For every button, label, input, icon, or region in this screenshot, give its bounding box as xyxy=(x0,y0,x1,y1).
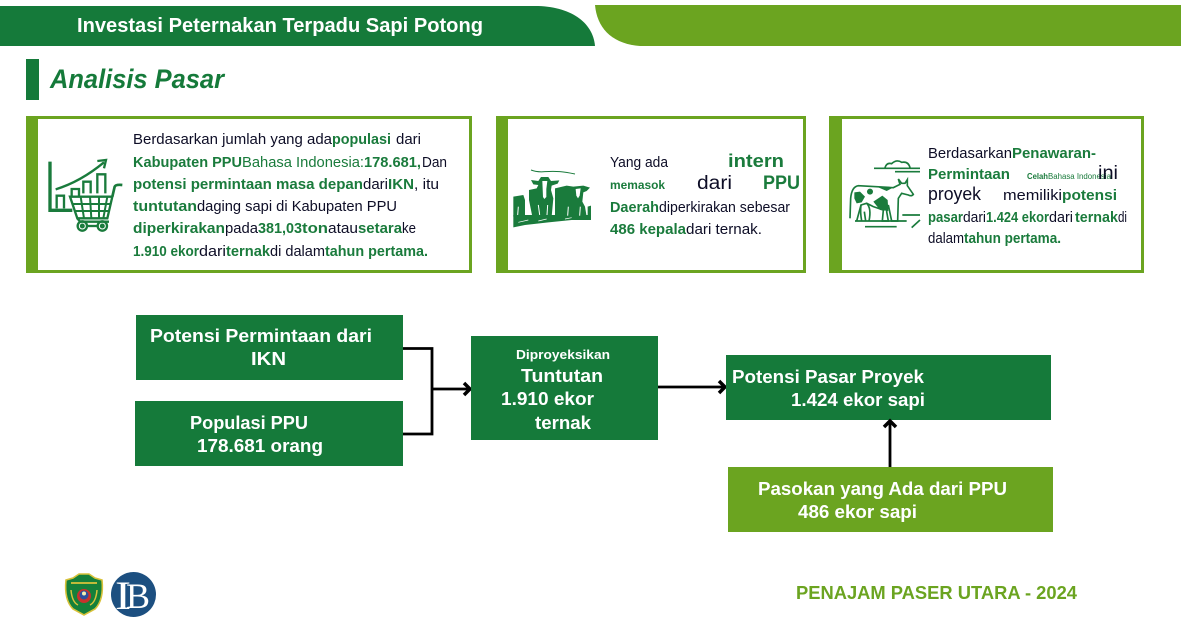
text: internal supply xyxy=(610,151,800,238)
text: population and demand: IKN xyxy=(388,177,414,193)
flow box: PPU population: Populasi PPU xyxy=(190,412,308,433)
text: population and demand: dari xyxy=(363,177,388,193)
flow box: project market potential: Potensi Pasar Proyek xyxy=(732,366,925,387)
text: supply-demand gap: tahun pertama. xyxy=(964,231,1061,247)
text: internal supply: dari xyxy=(697,173,732,194)
arrow: supply to market potential xyxy=(884,421,896,467)
footer text: PENAJAM PASER UTARA - 2024 xyxy=(796,582,1078,603)
text: population and demand: dari xyxy=(396,132,421,148)
text: internal supply: diperkirakan sebesar xyxy=(659,200,790,216)
panel: population and demand xyxy=(26,116,470,273)
text: population and demand: potensi permintaan masa depan xyxy=(133,177,363,193)
text: population and demand: di dalam xyxy=(270,244,325,260)
text: internal supply: Yang ada xyxy=(610,155,669,171)
text: supply-demand gap: dari xyxy=(963,210,986,226)
text: population and demand: ke xyxy=(402,221,416,237)
icon: herd of cows xyxy=(513,170,591,227)
text: population and demand: tahun pertama. xyxy=(325,244,428,260)
text: supply-demand gap: potensi xyxy=(1062,187,1117,204)
text: population and demand: daging sapi di Kabupaten PPU xyxy=(197,199,397,215)
text: supply-demand gap: dari xyxy=(1049,210,1073,226)
flow box: existing PPU supply: 486 ekor sapi xyxy=(798,501,917,522)
header bar xyxy=(0,6,595,46)
text: supply-demand gap xyxy=(928,146,1127,247)
flow box: projected demand: Diproyeksikan xyxy=(516,347,610,362)
text: population and demand: tuntutan xyxy=(133,199,197,215)
logo: regency crest xyxy=(66,574,102,615)
header accent bar xyxy=(595,5,1181,46)
text: population and demand: populasi xyxy=(332,132,391,148)
text: population and demand xyxy=(133,132,447,260)
logo: Bank Indonesia xyxy=(111,572,156,618)
text: population and demand: diperkirakan xyxy=(133,221,225,237)
arrow: demand to market potential xyxy=(658,381,725,393)
flow box: projected demand: Tuntutan xyxy=(521,366,603,386)
flow box: PPU population: 178.681 orang xyxy=(197,435,323,456)
text: internal supply: dari ternak. xyxy=(686,222,762,238)
text: population and demand: Berdasarkan jumlah yang ada xyxy=(133,132,333,148)
flow box: IKN demand potential xyxy=(136,315,403,380)
flow box: existing PPU supply: Pasokan yang Ada dari PPU xyxy=(758,478,1007,499)
text: supply-demand gap: Penawaran- xyxy=(1012,146,1096,162)
header title: Investasi Peternakan Terpadu Sapi Potong xyxy=(77,15,483,37)
text: supply-demand gap: proyek xyxy=(928,184,982,204)
text: population and demand: 1.910 ekor xyxy=(133,244,199,260)
logo: Bank Indonesia: I xyxy=(115,573,131,618)
flow box: project market potential xyxy=(726,355,1051,420)
text: population and demand: , itu xyxy=(414,177,439,193)
text: supply-demand gap: Berdasarkan xyxy=(928,146,1012,162)
section heading xyxy=(26,59,225,100)
text: internal supply: PPU xyxy=(763,173,800,194)
flow box: PPU population xyxy=(135,401,403,466)
text: supply-demand gap: Celah xyxy=(1027,172,1048,181)
text: population and demand: Kabupaten PPU xyxy=(133,155,242,171)
text: supply-demand gap: ternak xyxy=(1075,210,1119,226)
panel: internal supply xyxy=(496,116,804,273)
text: supply-demand gap: di xyxy=(1118,210,1127,226)
text: population and demand: Dan xyxy=(422,155,447,171)
heading text: Analisis Pasar xyxy=(49,64,225,94)
text: population and demand: dari xyxy=(199,244,226,260)
text: internal supply: intern xyxy=(728,151,784,171)
text: internal supply: memasok xyxy=(610,180,666,192)
arrow: inputs merge into projected demand xyxy=(403,348,470,434)
flow box: IKN demand potential: IKN xyxy=(251,348,286,369)
text: population and demand: atau xyxy=(328,221,358,237)
text: supply-demand gap: memiliki xyxy=(1003,187,1062,204)
text: population and demand: Bahasa Indonesia: xyxy=(242,155,364,171)
text: population and demand: setara xyxy=(358,221,403,237)
flow box: IKN demand potential: Potensi Permintaan dari xyxy=(150,325,372,346)
flow box: projected demand xyxy=(471,336,658,440)
text: internal supply: 486 kepala xyxy=(610,222,687,238)
flow box: project market potential: 1.424 ekor sapi xyxy=(791,389,925,410)
text: population and demand: 178.681, xyxy=(364,155,421,171)
panel: supply-demand gap xyxy=(829,116,1142,273)
flow box: projected demand: ternak xyxy=(535,413,592,433)
flow box: existing PPU supply xyxy=(728,467,1053,532)
text: supply-demand gap: 1.424 ekor xyxy=(986,210,1049,226)
text: population and demand: 381,03 xyxy=(258,221,302,237)
flow box: projected demand: 1.910 ekor xyxy=(501,389,594,409)
icon: cow in field xyxy=(850,161,920,228)
text: population and demand: ton xyxy=(302,221,328,237)
text: internal supply: Daerah xyxy=(610,200,659,216)
logo: Bank Indonesia: B xyxy=(126,576,150,616)
text: supply-demand gap: Bahasa Indonesia xyxy=(1048,172,1112,181)
text: population and demand: ternak xyxy=(226,244,271,260)
text: supply-demand gap: dalam xyxy=(928,231,964,247)
text: supply-demand gap: pasar xyxy=(928,210,963,226)
icon: chart and shopping cart xyxy=(50,160,122,231)
text: supply-demand gap: Permintaan xyxy=(928,166,1010,183)
text: supply-demand gap: ini xyxy=(1098,163,1118,184)
text: population and demand: pada xyxy=(225,221,259,237)
